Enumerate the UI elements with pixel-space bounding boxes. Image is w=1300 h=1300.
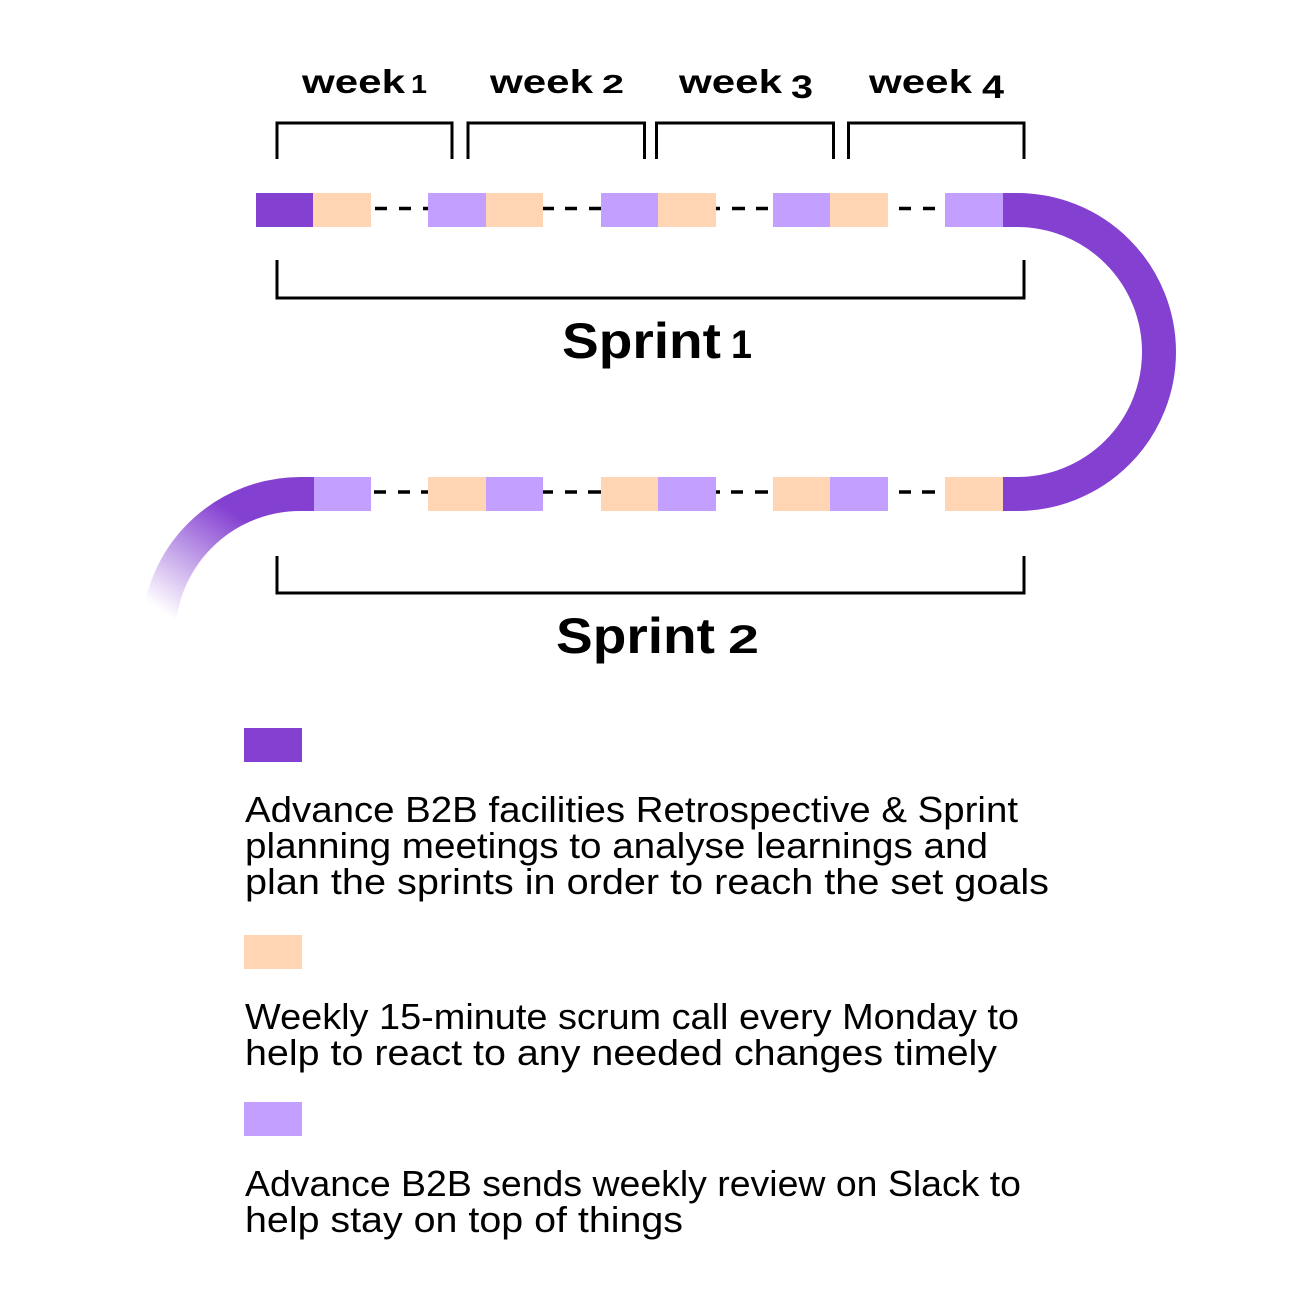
text: retrospective description: plan the sprints in order to reach the set goals (245, 861, 1049, 902)
heading: week 4 (868, 63, 1004, 105)
heading: week 1: week (301, 63, 406, 100)
text: scrum call description: help to react to any needed changes timely (245, 1032, 997, 1073)
text: weekly review description: help stay on top of things (245, 1199, 683, 1240)
heading: week 2: week (489, 63, 594, 100)
legend: weekly review (244, 1102, 1021, 1240)
text: retrospective description: planning meetings to analyse learnings and (245, 825, 988, 866)
heading: week 1: 1 (411, 69, 427, 99)
text: retrospective description: Advance B2B facilities Retrospective & Sprint (245, 789, 1018, 830)
heading: week 2 (489, 63, 624, 100)
swatch: peach (244, 935, 302, 969)
curve: connector between sprints (1003, 210, 1159, 494)
bracket: week 4 (848, 123, 1024, 159)
heading: Sprint 1: 1 (731, 323, 752, 367)
bracket: sprint 2 (277, 556, 1024, 593)
sprint 2 timeline (159, 477, 1003, 622)
text: scrum call description: Weekly 15-minute scrum call every Monday to (245, 996, 1019, 1037)
heading: Sprint 2: 2 (728, 618, 759, 662)
bracket: sprint 1 (277, 260, 1024, 298)
text: scrum call description (245, 996, 1019, 1073)
heading: week 1 (301, 63, 427, 100)
heading: week 4: 4 (982, 69, 1004, 105)
bracket: week 3 (656, 123, 834, 159)
legend: weekly scrum call (244, 935, 1019, 1073)
bracket: week 2 (468, 123, 644, 159)
legend: retrospective and planning (244, 728, 1049, 902)
heading: week 3 (678, 63, 813, 105)
heading: week 3: week (678, 63, 783, 100)
heading: week 3: 3 (791, 69, 813, 105)
sprint 1 timeline (256, 193, 1159, 494)
heading: week 2: 2 (602, 69, 624, 99)
curve: fading lead-out (159, 494, 314, 622)
bracket: week 1 (277, 123, 452, 159)
swatch: dark purple (244, 728, 302, 762)
text: weekly review description (245, 1163, 1021, 1240)
text: weekly review description: Advance B2B sends weekly review on Slack to (245, 1163, 1021, 1204)
heading: Sprint 1: Sprint (562, 313, 721, 369)
swatch: lilac (244, 1102, 302, 1136)
heading: week 4: week (868, 63, 973, 100)
heading: Sprint 2: Sprint (556, 608, 715, 664)
text: retrospective description (245, 789, 1049, 902)
